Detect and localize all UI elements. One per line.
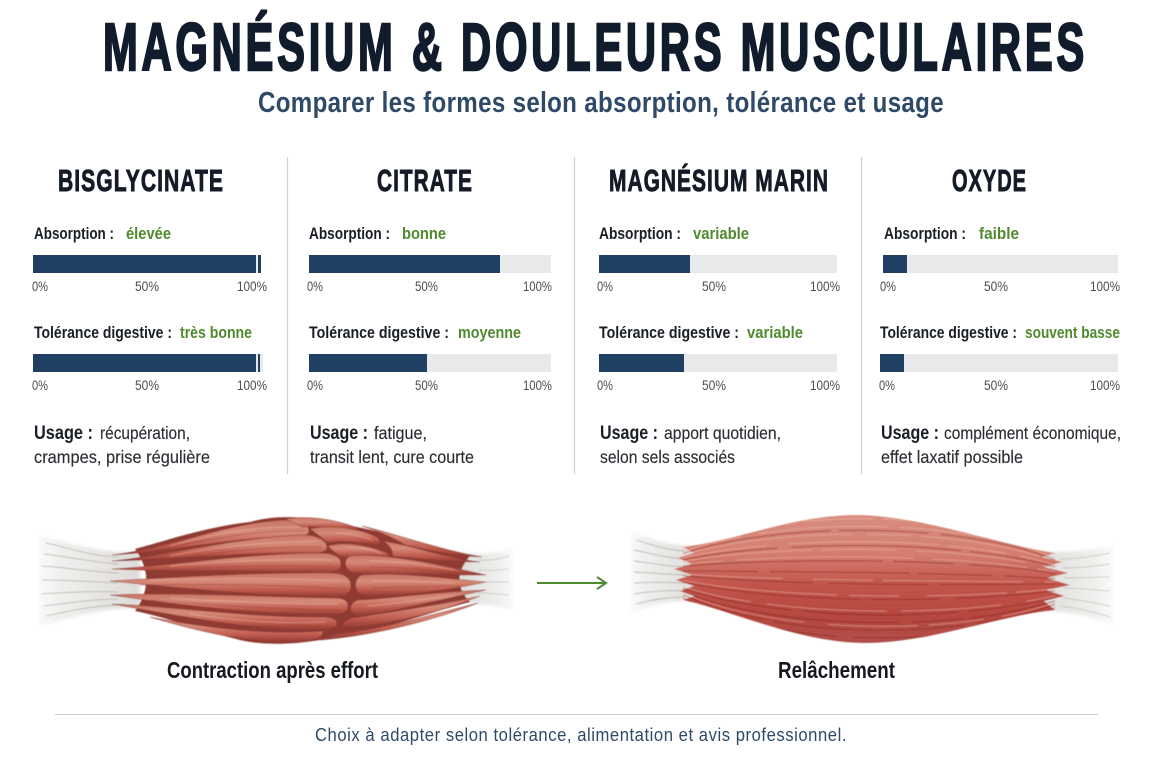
left tendon (630, 532, 700, 614)
right tendon (460, 548, 513, 610)
muscle bundles (110, 518, 486, 642)
illustration: contracted muscle (38, 517, 513, 644)
tolerance label: très bonne (180, 323, 252, 342)
muscle fibres (683, 519, 1055, 638)
tolerance bar: 0% (597, 378, 613, 393)
usage text: complément économique, (944, 423, 1121, 443)
panel: bisglycinate (32, 163, 267, 467)
usage text: Usage : (310, 423, 368, 444)
absorption bar: 100% (810, 279, 840, 294)
tolerance bar (307, 354, 552, 393)
tolerance bar (32, 354, 267, 393)
tolerance bar: 100% (523, 378, 552, 393)
footer note: Choix à adapter selon tolérance, alimentation et avis professionnel. (315, 725, 847, 745)
panel: magnesium marin (597, 163, 840, 467)
caption: contraction: Contraction après effort (167, 657, 378, 683)
usage text: apport quotidien, (664, 423, 781, 443)
panel: oxyde (879, 163, 1121, 467)
tolerance label: souvent basse (1025, 323, 1120, 342)
absorption bar (32, 255, 267, 294)
tolerance label: Tolérance digestive : (599, 323, 739, 342)
usage text (600, 423, 781, 467)
arrow (537, 577, 606, 589)
usage text: Usage : (600, 423, 658, 444)
tolerance bar: 100% (1090, 378, 1120, 393)
absorption bar: 50% (984, 279, 1008, 294)
usage text (310, 423, 474, 467)
tolerance bar: 0% (879, 378, 895, 393)
caption: relaxation: Relâchement (778, 657, 895, 683)
usage text: transit lent, cure courte (310, 447, 474, 467)
absorption label: Absorption : (309, 224, 390, 243)
panel: citrate (307, 163, 552, 467)
tolerance label: Tolérance digestive : (880, 323, 1017, 342)
absorption label (599, 224, 749, 243)
usage text (34, 423, 210, 467)
absorption bar: 0% (32, 279, 48, 294)
tolerance bar: 0% (307, 378, 323, 393)
usage text: récupération, (100, 423, 190, 443)
tolerance bar (879, 354, 1120, 393)
usage text: crampes, prise régulière (34, 447, 210, 467)
illustration: relaxed muscle (630, 515, 1114, 643)
absorption label: Absorption : (34, 224, 114, 243)
muscle body (674, 515, 1070, 643)
absorption bar (307, 255, 552, 294)
left tendon (38, 535, 140, 628)
right tendon (1040, 545, 1114, 625)
tolerance bar: 50% (702, 378, 726, 393)
tolerance bar: 0% (32, 378, 48, 393)
usage text (881, 423, 1121, 467)
absorption bar: 50% (135, 279, 159, 294)
tolerance label (880, 323, 1120, 342)
absorption label: Absorption : (599, 224, 681, 243)
heading: magnesium marin: MAGNÉSIUM MARIN (609, 163, 829, 198)
absorption label: variable (693, 224, 749, 243)
absorption label: bonne (402, 224, 446, 243)
heading: oxyde: OXYDE (952, 163, 1027, 198)
absorption bar (597, 255, 840, 294)
tolerance label: variable (747, 323, 803, 342)
absorption label: élevée (126, 224, 171, 243)
absorption label: Absorption : (884, 224, 966, 243)
absorption bar: 50% (702, 279, 726, 294)
tolerance label: Tolérance digestive : (309, 323, 449, 342)
subtitle: Comparer les formes selon absorption, tolérance et usage (258, 87, 944, 119)
absorption label: faible (979, 224, 1019, 243)
tolerance bar: 50% (984, 378, 1008, 393)
absorption bar: 50% (415, 279, 438, 294)
heading: citrate: CITRATE (377, 163, 473, 198)
absorption bar: 100% (523, 279, 552, 294)
tolerance bar: 50% (135, 378, 159, 393)
bundle highlights (150, 527, 455, 623)
usage text: selon sels associés (600, 447, 735, 467)
muscle body (135, 517, 470, 644)
absorption bar: 100% (1090, 279, 1120, 294)
tolerance label: Tolérance digestive : (34, 323, 172, 342)
tolerance bar (597, 354, 840, 393)
heading: bisglycinate: BISGLYCINATE (58, 163, 224, 198)
absorption bar: 100% (237, 279, 267, 294)
tolerance label: moyenne (458, 323, 521, 342)
absorption bar (880, 255, 1120, 294)
usage text: fatigue, (374, 423, 427, 443)
tolerance bar: 50% (415, 378, 438, 393)
usage text: effet laxatif possible (881, 447, 1023, 467)
usage text: Usage : (881, 423, 939, 444)
absorption bar: 0% (880, 279, 896, 294)
tolerance bar: 100% (237, 378, 267, 393)
usage text: Usage : (34, 423, 93, 444)
absorption bar: 0% (597, 279, 613, 294)
tolerance bar: 100% (810, 378, 840, 393)
absorption bar: 0% (307, 279, 323, 294)
